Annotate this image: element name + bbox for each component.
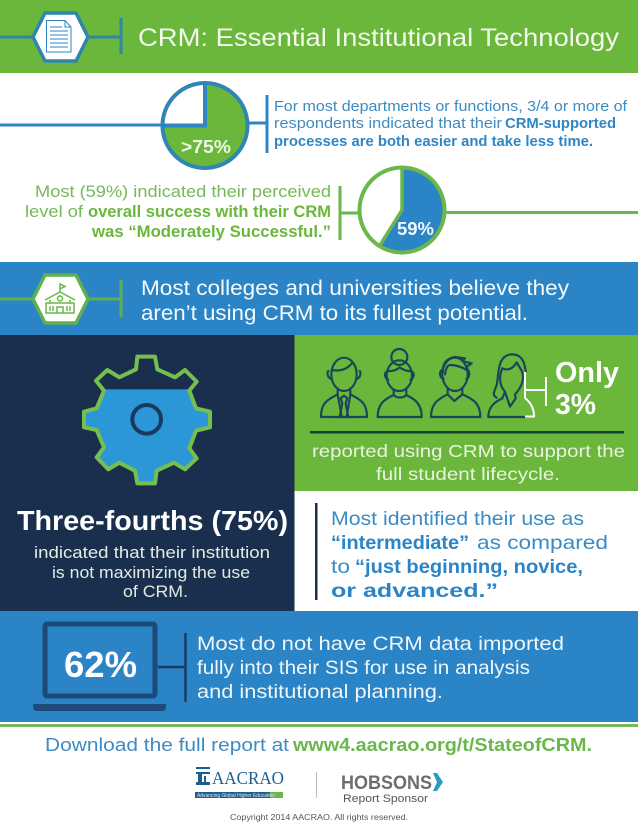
text: overall success: overall success with their CRM (88, 203, 331, 221)
icon: laptop (33, 624, 166, 711)
blue band: fullest potential: Most colleges and universities believe they (141, 276, 569, 300)
icon: school hexagon (0, 275, 121, 323)
chart: 59 percent pie: 59% (397, 219, 434, 239)
blue band: fullest potential (0, 262, 638, 335)
text: not maximizing: is not maximizing the use (52, 564, 250, 582)
download link: www4.aacrao.org/t/StateofCRM. (292, 735, 592, 755)
header band (0, 0, 638, 73)
icon: four people (321, 349, 526, 417)
chart: 75 percent pie: >75% (181, 137, 231, 157)
bracket: white connector (525, 372, 546, 416)
download link (45, 735, 592, 755)
text: overall success: was “Moderately Successful.” (91, 223, 331, 241)
logo: AACRAO: Advancing Global Higher Education (197, 793, 275, 799)
icon: gear (84, 357, 210, 483)
copyright: Copyright 2014 AACRAO. All rights reserved. (230, 812, 408, 822)
text: easier processes (274, 99, 628, 150)
text: not maximizing: of CRM. (123, 583, 188, 601)
text: easier processes: CRM-supported (505, 116, 616, 132)
logo: Hobsons: HOBSONS (341, 773, 432, 794)
title: CRM: Essential Institutional Technology (138, 24, 620, 52)
download link: Download the full report at (45, 735, 289, 755)
text: easier processes: For most departments or functions, 3/4 or more of (274, 99, 628, 115)
logo: AACRAO: AACRAO (212, 768, 284, 788)
text: SIS import: Most do not have CRM data imported (197, 633, 564, 655)
panel: only 3 percent (294, 335, 638, 491)
icon: document hexagon (0, 13, 121, 61)
panel: intermediate use: “intermediate” (331, 532, 469, 554)
text: overall success (25, 183, 331, 241)
panel: intermediate use: as compared (477, 532, 608, 554)
panel: intermediate use: Most identified their use as (331, 508, 584, 530)
blue band: fullest potential: aren’t using CRM to its fullest potential. (141, 301, 528, 325)
logo: Hobsons: Report Sponsor (343, 793, 428, 805)
panel: intermediate use: or advanced.” (331, 580, 498, 602)
logo: Hobsons (341, 773, 443, 805)
panel: 62 percent (0, 611, 638, 722)
logo: AACRAO (195, 767, 284, 799)
text: overall success: Most (59%) indicated their perceived (35, 183, 331, 201)
text: SIS import: fully into their SIS for use in analysis (197, 657, 530, 679)
text: easier processes: respondents indicated that their (274, 116, 502, 132)
text: lifecycle: reported using CRM to support the (312, 441, 625, 461)
text: easier processes: processes are both easier and take less time. (274, 134, 593, 150)
text: not maximizing: indicated that their institution (34, 544, 270, 562)
panel: only 3 percent: 3% (555, 389, 596, 421)
panel: only 3 percent: Only (555, 357, 619, 389)
chart: 59 percent pie (340, 167, 638, 252)
text: overall success: level of (25, 203, 83, 221)
panel: three-fourths (0, 335, 294, 611)
chart: 75 percent pie (0, 83, 267, 168)
text: SIS import (197, 633, 564, 703)
text: not maximizing (34, 544, 270, 601)
text: SIS import: and institutional planning. (197, 681, 443, 703)
icon: laptop: 62% (64, 644, 137, 685)
text: lifecycle (312, 441, 625, 484)
panel: intermediate use: “just beginning, novice, (355, 556, 583, 578)
panel: intermediate use: to (331, 556, 350, 578)
text: lifecycle: full student lifecycle. (376, 464, 560, 484)
panel: intermediate use (315, 503, 608, 602)
panel: three-fourths: Three-fourths (75%) (17, 505, 288, 536)
